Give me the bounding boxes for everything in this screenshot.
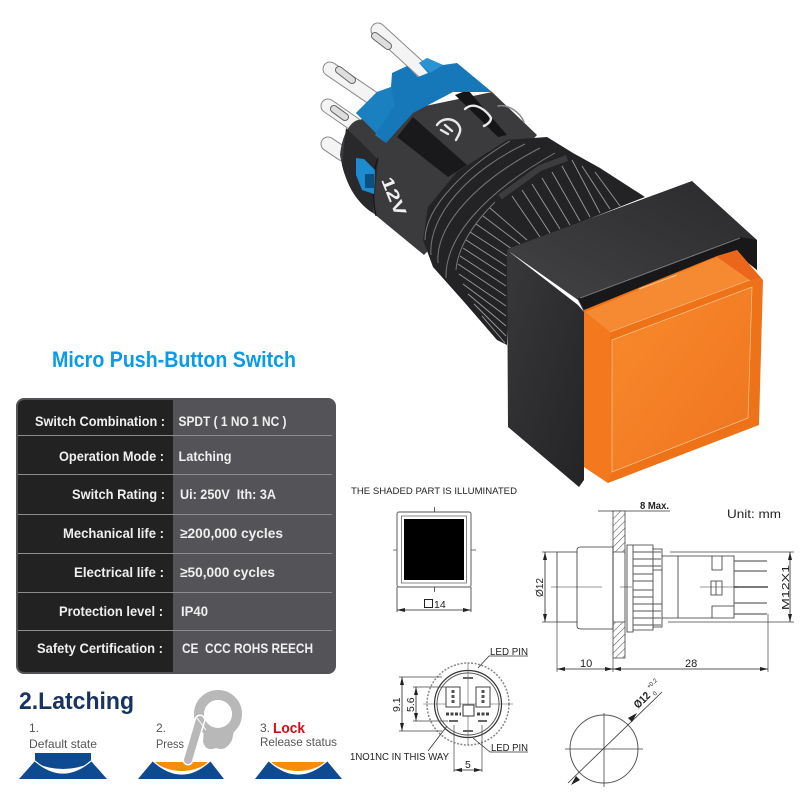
step 3: lock: Release status [260,735,337,749]
drawing: rear view [350,647,528,772]
drawing: front view [351,486,517,612]
row: mechanical life: Mechanical life : [63,525,164,541]
row: switch rating: Switch Rating : [72,486,165,502]
step 2: press: Press [156,737,184,751]
drawing: side view: M12X1 [780,565,792,610]
terminals [328,30,424,154]
title: Micro Push-Button Switch [52,347,296,372]
drawing: mounting hole: 0 [652,690,659,697]
step 3: lock [255,720,342,779]
row: safety certification: CE CCC ROHS REECH [182,640,313,656]
row: switch rating [72,486,276,502]
body markings [437,106,524,140]
row: switch rating: Ui: 250V Ith: 3A [180,486,276,502]
threaded collar and knurled nut [423,137,645,345]
step 2: press [138,695,237,779]
orange lens [584,250,763,483]
icon: hand pressing [188,695,237,760]
row: safety certification [37,640,313,656]
drawing: side view: 8 Max. [640,501,669,512]
drawing: rear view: 1NO1NC IN THIS WAY [350,752,449,763]
step 1: default state [19,721,107,779]
row: electrical life [74,564,275,580]
row: electrical life: ≥50,000 cycles [180,564,275,580]
row: switch combination: Switch Combination : [35,413,165,429]
drawing: front view: THE SHADED PART IS ILLUMINATED [351,486,517,497]
step 1: default state: Default state [29,737,97,751]
panel: specification table [16,398,336,674]
pins [734,561,768,614]
row: mechanical life: ≥200,000 cycles [180,525,283,541]
dimension lines [542,552,794,672]
product photo: push-button switch [328,30,763,487]
unit label: Unit: mm [727,507,781,521]
drawing: side view: Ø12 [534,578,546,597]
drawing: mounting hole [565,677,662,787]
row: electrical life: Electrical life : [74,564,164,580]
blue window [356,158,375,194]
step 1: default state: 1. [29,721,39,735]
row: protection level: IP40 [181,603,208,619]
step 3: lock: 3. [260,721,270,735]
drawing: side view: 28 [685,658,697,670]
row: mechanical life [63,525,283,541]
row: protection level: Protection level : [59,603,163,619]
drawing: mounting hole: Ø12 [632,690,653,711]
row: switch combination: SPDT ( 1 NO 1 NC ) [178,413,286,429]
square bezel [507,181,757,312]
blue end cap [356,58,492,143]
knurling [458,160,620,343]
row: safety certification: Safety Certification : [37,640,163,656]
drawing: front view: 14 [434,599,446,611]
step 3: lock: Lock [273,720,306,737]
switch body [340,92,537,255]
row: operation mode: Latching [178,448,232,464]
drawing: side view [534,501,794,672]
drawing: rear view: LED PIN [491,743,528,754]
row: switch combination [35,413,286,429]
drawing: side view: 10 [580,658,592,670]
drawing: rear view: LED PIN [490,647,528,658]
panel hatching [613,511,625,658]
row: operation mode [59,448,232,464]
heading: latching: 2.Latching [19,688,134,715]
drawing: rear view: 9.1 [391,697,403,712]
drawing: rear view: 5 [465,759,471,771]
step 2: press: 2. [156,721,166,735]
drawing: rear view: 5.6 [405,697,417,712]
row: operation mode: Operation Mode : [59,448,164,464]
knurl lines [633,552,661,625]
drawing: mounting hole: +0.2 [646,677,659,690]
voltage marking: 12V [377,174,410,219]
